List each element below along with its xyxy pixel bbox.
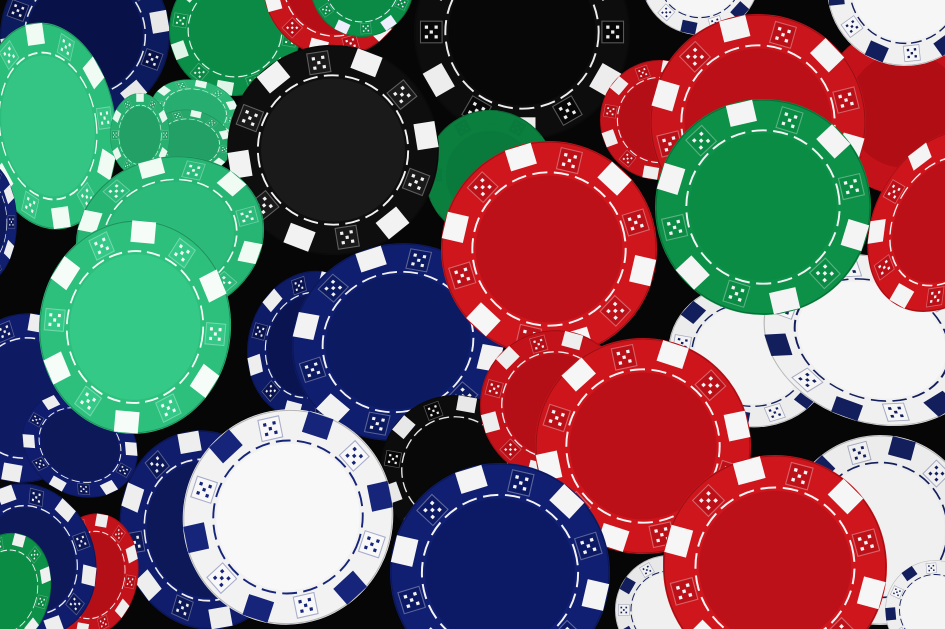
chip: white top right: [802, 0, 945, 91]
chip: navy lower left back: [3, 372, 157, 518]
chip: black lower center: [368, 383, 542, 557]
chip: white behind right: [657, 270, 843, 440]
chip: red bottom left: [36, 506, 148, 629]
chip: black top: [414, 0, 630, 140]
chip: navy lower left: [0, 301, 114, 495]
chip: navy bottom left: [0, 464, 118, 629]
chip: mint top left: [0, 14, 130, 238]
chip: red large center: [414, 114, 684, 384]
chip: white top middle: [629, 0, 771, 46]
chip: navy center: [266, 216, 530, 468]
chip: small mint stack back: [144, 71, 246, 153]
chip: red right edge: [836, 102, 945, 340]
chip: white lower middle: [615, 555, 725, 629]
chip: black upper center: [196, 14, 470, 286]
chip: red lower center: [507, 310, 779, 582]
chip: white bottom right corner: [869, 544, 945, 629]
chip: mint middle back: [58, 135, 282, 339]
chip: navy bottom center: [363, 436, 637, 629]
chip: mint front left: [30, 212, 240, 442]
chip: small mint behind: [110, 93, 170, 177]
chip: white right: [739, 225, 945, 455]
chip: white lower right back: [764, 414, 945, 629]
chip: green top: [159, 0, 311, 106]
chip: small mint stack front: [142, 102, 238, 182]
chip: red upper right: [627, 0, 889, 253]
chip: white bottom center: [155, 382, 421, 629]
chip: navy bottom back: [104, 417, 306, 629]
chip: green bottom left corner: [0, 522, 64, 629]
chip: red behind center: [590, 50, 730, 190]
chip: red top: [247, 0, 423, 73]
chip: red bottom right: [638, 430, 912, 629]
chip: green upper right: [633, 77, 893, 337]
chip: navy left edge: [0, 160, 17, 284]
chip: navy top left: [0, 0, 194, 144]
chip: red far right behind: [796, 1, 945, 219]
chip: navy behind center: [231, 257, 389, 433]
chip: red behind lower center: [463, 313, 647, 497]
chip: green top behind black: [293, 0, 431, 54]
chip: dark green behind black: [425, 110, 555, 240]
